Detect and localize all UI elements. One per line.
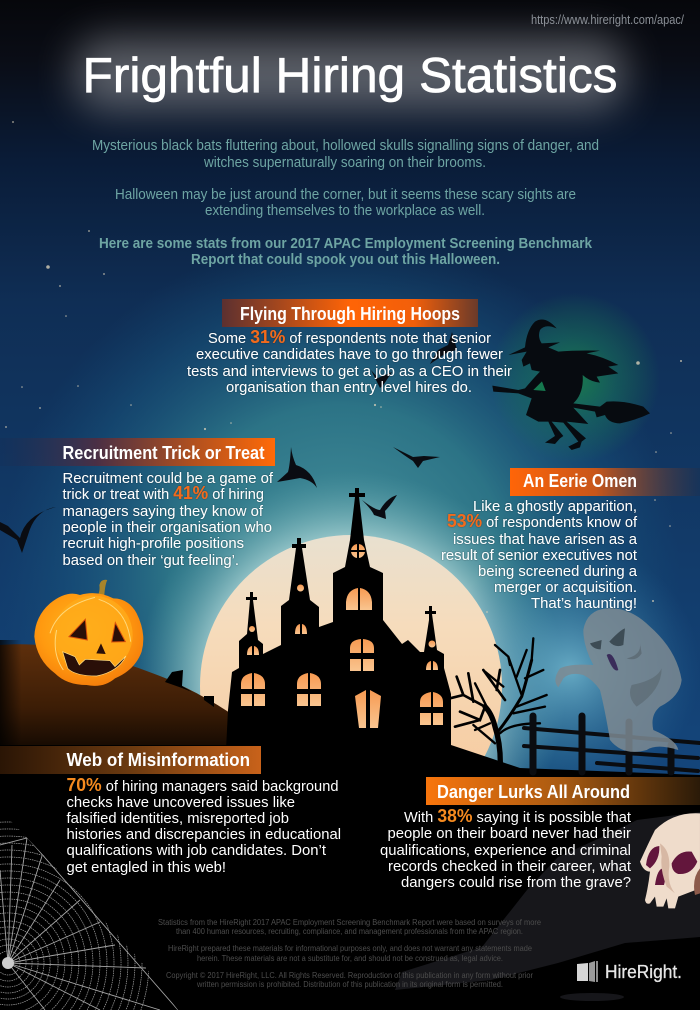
section: An Eerie Omen: result of senior executives not bbox=[441, 547, 638, 564]
section: Recruitment Trick or Treat: recruit high-profile positions bbox=[62, 535, 244, 552]
section: Web of Misinformation: 70% of hiring managers said background bbox=[66, 775, 338, 795]
footer notes: Copyright © 2017 HireRight, LLC. All Rights Reserved. Reproduction of this publication in any form without prior bbox=[166, 970, 533, 980]
grave shadow bbox=[395, 812, 700, 990]
section: Danger Lurks All Around: Danger Lurks All Around bbox=[437, 782, 630, 802]
smudge bbox=[560, 993, 624, 1001]
section: Flying Through Hiring Hoops: tests and interviews to get a job as a CEO in their bbox=[187, 363, 512, 380]
section: Danger Lurks All Around: records checked in their career, what bbox=[388, 858, 632, 875]
source url: https://www.hireright.com/apac/ bbox=[531, 13, 684, 27]
ghost bbox=[555, 608, 682, 752]
section: Flying Through Hiring Hoops: executive candidates have to go through fewer bbox=[196, 346, 503, 363]
section: Recruitment Trick or Treat: managers saying they know of bbox=[62, 503, 264, 520]
windows bbox=[241, 544, 443, 728]
intro text bbox=[92, 138, 599, 268]
section: An Eerie Omen: being screened during a bbox=[478, 563, 638, 580]
section: Recruitment Trick or Treat: people in their organisation who bbox=[62, 519, 272, 536]
footer notes bbox=[158, 917, 541, 989]
stars bbox=[5, 121, 682, 619]
section: Danger Lurks All Around: dangers could rise from the grave? bbox=[401, 874, 631, 891]
section: Danger Lurks All Around bbox=[380, 777, 700, 891]
section: Recruitment Trick or Treat: Recruitment could be a game of bbox=[62, 470, 274, 487]
skull bbox=[640, 813, 700, 908]
title: Frightful Hiring Statistics bbox=[82, 49, 618, 103]
footer notes: Statistics from the HireRight 2017 APAC Employment Screening Benchmark Report were based on surveys of more bbox=[158, 917, 541, 927]
spider web bbox=[0, 820, 178, 1010]
small bat behind text bbox=[371, 370, 392, 388]
intro text: Here are some stats from our 2017 APAC Employment Screening Benchmark bbox=[99, 236, 593, 252]
bats bbox=[0, 332, 457, 553]
bat left of spire bbox=[277, 447, 317, 488]
intro text: witches supernaturally soaring on their brooms. bbox=[203, 155, 486, 171]
dead tree bbox=[450, 638, 547, 773]
section: Danger Lurks All Around: qualifications, experience and criminal bbox=[380, 842, 631, 859]
section: Recruitment Trick or Treat: based on their ‘gut feeling’. bbox=[62, 552, 239, 569]
moon bbox=[200, 535, 502, 837]
section: An Eerie Omen: An Eerie Omen bbox=[523, 471, 637, 491]
footer notes: HireRight prepared these materials for informational purposes only, and does not warrant any statements made bbox=[168, 943, 532, 953]
witch bbox=[492, 319, 650, 450]
bat middle bbox=[393, 447, 440, 468]
fence bbox=[524, 716, 700, 772]
footer notes: herein. These materials are not a substitute for, and should not be construed as, legal advice. bbox=[197, 953, 503, 963]
HireRight logo bbox=[577, 961, 682, 982]
section: An Eerie Omen: Like a ghostly apparition, bbox=[473, 498, 637, 515]
section: An Eerie Omen: issues that have arisen as a bbox=[453, 531, 638, 548]
footer notes: than 400 human resources, recruiting, compliance, and management professionals from the APAC region. bbox=[176, 926, 523, 936]
hill with grave bbox=[0, 640, 240, 775]
section: Danger Lurks All Around: With 38% saying it is possible that bbox=[404, 806, 632, 826]
bat at spire bbox=[362, 495, 397, 519]
section: An Eerie Omen bbox=[441, 468, 700, 612]
intro text: extending themselves to the workplace as well. bbox=[205, 203, 485, 219]
section: Flying Through Hiring Hoops: organisation than entry level hires do. bbox=[226, 379, 472, 396]
section: Recruitment Trick or Treat bbox=[0, 438, 275, 569]
section: Web of Misinformation: checks have uncovered issues like bbox=[66, 794, 295, 811]
section: Web of Misinformation: histories and discrepancies in educational bbox=[66, 826, 341, 843]
section: Web of Misinformation: falsified identities, misreported job bbox=[66, 810, 289, 827]
section: An Eerie Omen: 53% of respondents know of bbox=[447, 511, 638, 531]
bat far left bbox=[0, 507, 56, 553]
section: Web of Misinformation bbox=[0, 746, 341, 876]
section: Web of Misinformation: get entagled in this web! bbox=[66, 859, 226, 876]
section: Flying Through Hiring Hoops: Some 31% of respondents note that senior bbox=[208, 327, 491, 347]
haunted house bbox=[225, 488, 451, 770]
intro text: Mysterious black bats fluttering about, hollowed skulls signalling signs of danger, and bbox=[92, 138, 599, 154]
footer notes: written permission is prohibited. Distribution of this publication in its original form is permitted. bbox=[196, 979, 503, 989]
bat behind text bbox=[430, 332, 457, 364]
section: Flying Through Hiring Hoops: Flying Through Hiring Hoops bbox=[240, 304, 460, 324]
ground bbox=[0, 720, 700, 1010]
section: Web of Misinformation: Web of Misinformation bbox=[66, 750, 250, 770]
section: Danger Lurks All Around: people on their board never had their bbox=[388, 825, 631, 842]
section: Recruitment Trick or Treat: Recruitment Trick or Treat bbox=[62, 443, 265, 463]
section: Web of Misinformation: qualifications with job candidates. Don’t bbox=[66, 842, 327, 859]
section: Recruitment Trick or Treat: trick or treat with 41% of hiring bbox=[62, 483, 264, 503]
section: An Eerie Omen: That’s haunting! bbox=[531, 595, 637, 612]
intro text: Report that could spook you out this Halloween. bbox=[191, 252, 500, 268]
section: An Eerie Omen: merger or acquisition. bbox=[494, 579, 637, 596]
pumpkin bbox=[34, 580, 143, 686]
HireRight logo: HireRight. bbox=[605, 962, 682, 982]
section: Flying Through Hiring Hoops bbox=[187, 299, 512, 396]
intro text: Halloween may be just around the corner, but it seems these scary sights are bbox=[115, 187, 576, 203]
